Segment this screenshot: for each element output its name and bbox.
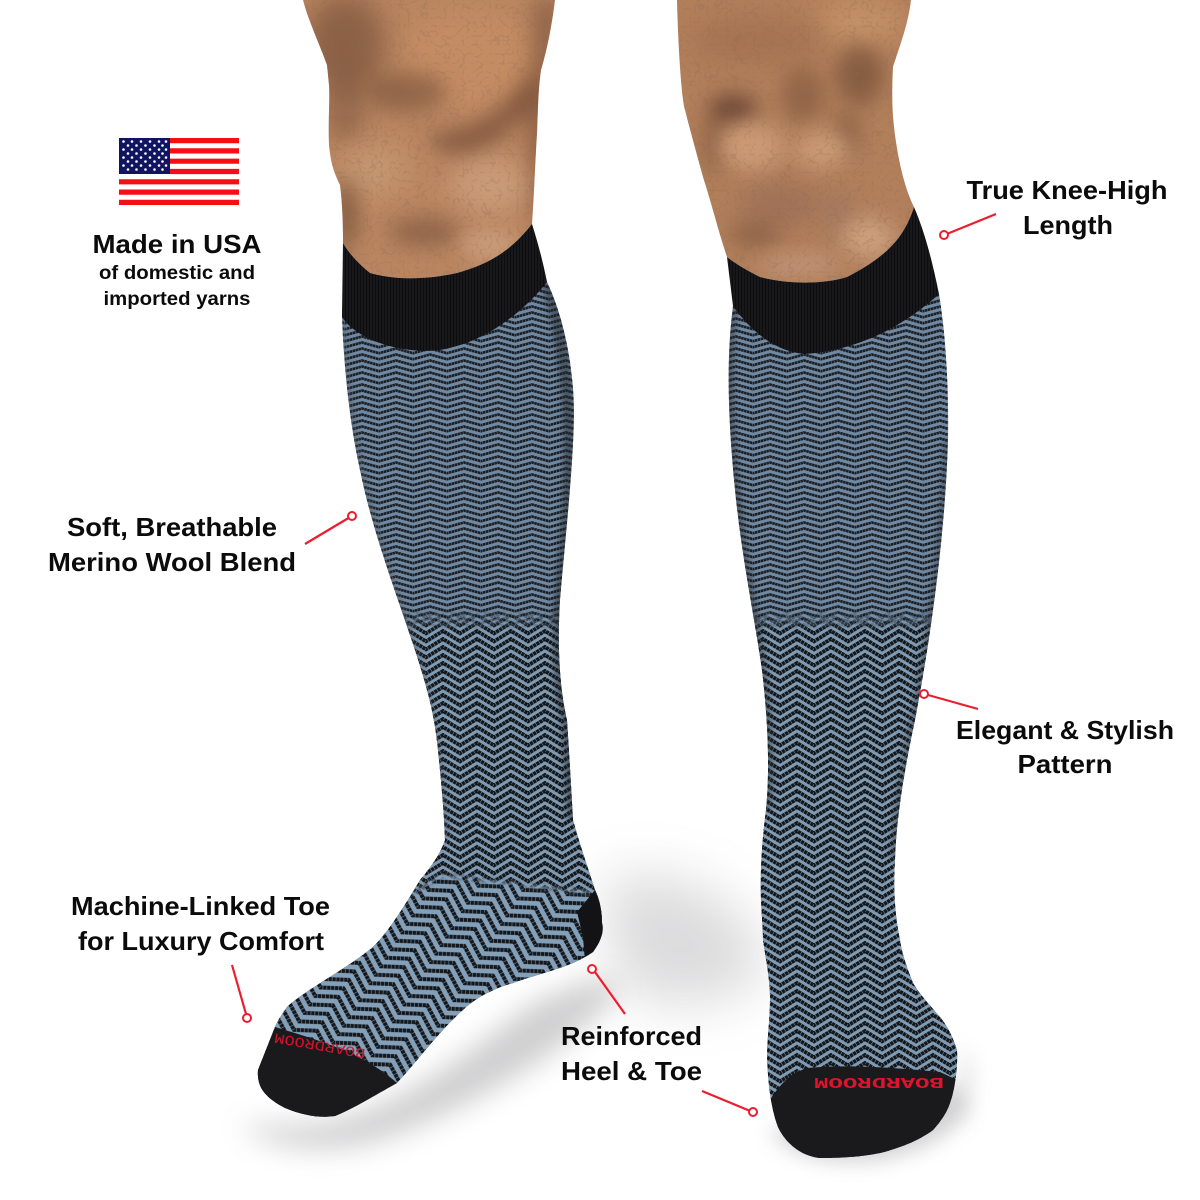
photo: legs wearing knee-high socks — [200, 0, 975, 1170]
right sock black cuff — [727, 207, 939, 354]
callout: Machine-Linked Toe for Luxury Comfort: for Luxury Comfort — [78, 926, 324, 956]
callout: Reinforced Heel and Toe: Reinforced — [561, 1021, 702, 1051]
callout: Elegant and Stylish Pattern: Elegant & Stylish — [956, 715, 1174, 745]
right toe label: BOARDROOM — [814, 1073, 944, 1090]
left toe reinforcement — [258, 1027, 397, 1117]
floor shadows — [240, 875, 975, 1162]
right sock with herringbone pattern — [720, 285, 960, 1170]
callout: Reinforced Heel and Toe: Heel & Toe — [561, 1056, 702, 1086]
left sock with herringbone pattern — [258, 282, 603, 1117]
callout: Soft, Breathable Merino Wool Blend: Soft, Breathable — [67, 512, 277, 542]
left leg skin — [303, 0, 555, 278]
right toe reinforcement — [770, 1066, 956, 1158]
left heel reinforcement — [578, 890, 603, 958]
callout: Soft, Breathable Merino Wool Blend — [48, 512, 356, 577]
callout: Soft, Breathable Merino Wool Blend: Merino Wool Blend — [48, 547, 296, 577]
callout: Machine-Linked Toe for Luxury Comfort — [71, 891, 330, 1022]
text: Made in USA: of domestic and — [99, 263, 255, 284]
left sock black cuff — [342, 224, 547, 351]
callout: Elegant and Stylish Pattern: Pattern — [1018, 749, 1112, 779]
left toe label: BOARDROOM — [273, 1028, 367, 1060]
callout: True Knee-High Length: True Knee-High — [966, 175, 1168, 205]
icon: American flag — [119, 138, 239, 205]
text: Made in USA: imported yarns — [104, 289, 250, 310]
callout: Elegant and Stylish Pattern — [920, 690, 1174, 779]
callout: True Knee-High Length — [940, 175, 1168, 240]
text: Made in USA — [92, 229, 262, 310]
text: Made in USA: Made in USA — [92, 229, 262, 259]
right leg skin — [670, 0, 920, 295]
callout: True Knee-High Length: Length — [1023, 210, 1113, 240]
callout: Machine-Linked Toe for Luxury Comfort: Machine-Linked Toe — [71, 891, 330, 921]
callout: Reinforced Heel and Toe — [561, 965, 757, 1116]
